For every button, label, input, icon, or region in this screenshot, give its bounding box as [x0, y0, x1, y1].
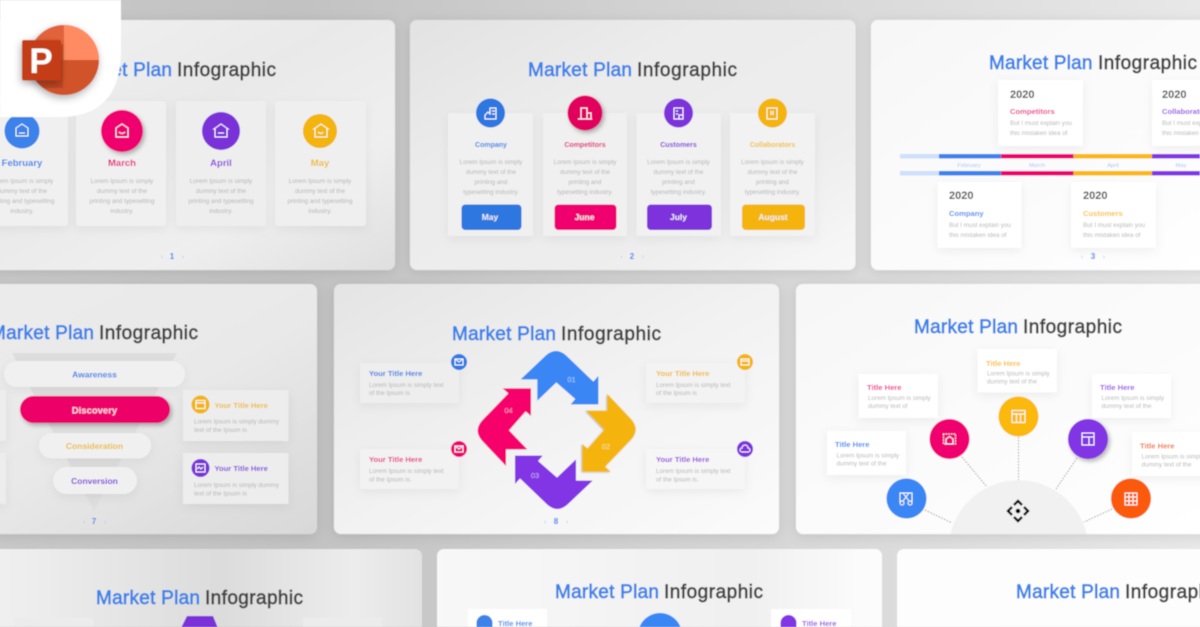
card: May: printing and typesetting: [287, 198, 353, 205]
heading: slide 9 title: Market Plan: [914, 317, 1018, 338]
panel: slide 2 quarters: [410, 20, 856, 270]
heading: slide 8 title: Market Plan: [452, 324, 556, 345]
card: Collaborators: [730, 98, 815, 236]
card: Competitors 2020: But I must explain you: [1010, 120, 1072, 127]
page number 7: ‹: [83, 519, 86, 526]
card: bottom-right purple: [646, 441, 753, 489]
heading: slide 3 title: [989, 53, 1197, 74]
funnel step: Consideration: [39, 433, 151, 458]
heading: slide 7 title: Infographic: [99, 323, 198, 344]
card: blue title: dummy text of the: [836, 460, 887, 468]
card: Company 2020: 2020: [949, 190, 973, 202]
card: February: industry.: [10, 208, 34, 215]
card: March: March: [108, 158, 136, 169]
card: February: February: [2, 158, 43, 169]
funnel step: Conversion: Conversion: [71, 476, 118, 486]
timeline bars: May: [1176, 163, 1187, 169]
card: April: April: [210, 158, 232, 169]
card: bottom-left pink: Your Title Here: [369, 455, 422, 464]
cycle arrows: [478, 351, 636, 509]
card: Competitors 2020: this mistaken idea of: [1010, 130, 1068, 137]
page number 2: [620, 252, 645, 261]
card: Company: Company: [475, 142, 507, 149]
card: Collaborators 2020: [1152, 80, 1200, 146]
arrow numbers: 03: [531, 471, 539, 480]
card: April: dummy text of the: [196, 188, 247, 195]
heading: slide 11 title: [555, 582, 763, 603]
arrow: 04 pink: [478, 388, 531, 466]
card: Company 2020: Company: [949, 209, 984, 218]
heading: slide 1 title: [68, 60, 276, 81]
card: bottom-left pink: of the Ipsum is.: [369, 476, 412, 484]
arrow numbers: 01: [567, 375, 576, 384]
panel: slide 9 semicircle hub: [796, 284, 1200, 534]
arrow: 02 yellow: [582, 394, 636, 472]
page number 7: ›: [104, 519, 107, 526]
card: Competitors 2020: Competitors: [1010, 107, 1055, 116]
card: Company: [448, 98, 533, 236]
card: bottom-left pink: [360, 441, 467, 489]
card: top-left blue: [360, 354, 467, 403]
card: yellow title: Lorem Ipsum is simply: [987, 370, 1050, 378]
node: orange grid: [1111, 478, 1151, 518]
node: blue scissors: [886, 478, 926, 518]
card: April: Lorem Ipsum is simply: [190, 178, 253, 185]
card: Customers 2020: Customers: [1083, 209, 1123, 218]
card: purple title: Lorem Ipsum is simply dummy: [194, 482, 280, 489]
card: top-right yellow: Lorem Ipsum is simply text: [656, 382, 731, 389]
heading: slide 3 title: Infographic: [1098, 53, 1197, 74]
heading: slide 2 title: Infographic: [637, 60, 737, 81]
page number 2: ‹: [620, 254, 623, 261]
heading: slide 2 title: [528, 60, 737, 81]
card: Competitors: Competitors: [564, 142, 606, 149]
heading: slide 9 title: Infographic: [1023, 317, 1122, 338]
heading: slide 9 title: [914, 317, 1122, 338]
card: purple title: dummy text of the: [1102, 403, 1152, 410]
card: May: dummy text of the: [295, 188, 346, 195]
funnel step: Conversion: [53, 467, 137, 494]
funnel step: Discovery: [20, 396, 170, 423]
card: Customers 2020: this mistaken idea of: [1083, 232, 1141, 239]
card: Customers: Lorem Ipsum is simply: [647, 159, 711, 166]
card: April: [176, 101, 266, 226]
arrow numbers: 04: [504, 406, 513, 415]
card: top-left blue: Lorem Ipsum is simply text: [369, 382, 444, 389]
card: Collaborators: dummy text of the: [747, 169, 798, 176]
heading: slide 11 title: Market Plan: [555, 582, 659, 603]
card: Competitors: June: [575, 212, 595, 222]
panel: slide 10 partial: [0, 549, 422, 627]
card: March: [76, 101, 166, 226]
card: Company 2020: But I must explain you: [949, 222, 1011, 229]
card: blue title: Title Here: [835, 440, 869, 449]
card: top-right yellow: of the Ipsum is: [656, 390, 697, 397]
card: Collaborators: August: [758, 212, 788, 222]
card: top-right yellow: [646, 354, 753, 403]
page number 1: [161, 252, 185, 261]
node: yellow table: [998, 396, 1038, 436]
heading: slide 8 title: Infographic: [561, 324, 661, 345]
card: Competitors: [543, 96, 627, 236]
card: bottom-right purple: of the Ipsum is.: [656, 476, 699, 484]
card: Company: dummy text of the: [466, 169, 517, 176]
node: purple layout: [1068, 419, 1108, 459]
card: Company 2020: [938, 182, 1022, 248]
card: May: industry.: [308, 208, 332, 215]
card: blue title: Lorem Ipsum is simply: [836, 452, 900, 460]
heading: slide 7 title: [0, 323, 198, 344]
page number 7: 7: [92, 517, 97, 526]
card: Customers: Customers: [660, 142, 697, 149]
cards partial: [14, 618, 382, 627]
badge: PowerPoint logo: [0, 0, 121, 117]
card: top-left blue: of the Ipsum is: [369, 390, 410, 397]
card: yellow title: dummy text of the: [987, 378, 1038, 386]
panel: slide 12 partial: [897, 549, 1200, 627]
card: Company: Lorem Ipsum is simply: [460, 159, 523, 166]
page number 3: ›: [1103, 254, 1106, 261]
card: yellow title: Title Here: [986, 359, 1020, 368]
card: orange title: [1132, 432, 1200, 476]
heading: slide 10 title: [96, 588, 303, 609]
arrow: 01 blue: [521, 351, 598, 404]
heading: slide 12 title: [1016, 582, 1200, 603]
heading: slide 2 title: Market Plan: [528, 60, 632, 81]
card: Customers: printing and: [662, 179, 695, 186]
card: Customers: [636, 98, 721, 236]
card: yellow title: Your Title Here: [214, 401, 268, 410]
page number 2: 2: [630, 252, 635, 261]
card: Competitors: printing and: [569, 179, 602, 186]
funnel step: Consideration: Consideration: [66, 441, 123, 451]
card: pink title: Lorem Ipsum is simply: [868, 395, 931, 402]
card: purple title: [183, 453, 288, 504]
dotted connectors: [925, 437, 1112, 523]
heading: slide 11 title: Infographic: [664, 582, 763, 603]
card: Competitors: Lorem Ipsum is simply: [554, 159, 617, 166]
heading: slide 8 title: [452, 324, 661, 345]
page number 2: ›: [642, 254, 645, 261]
card: Company: printing and: [475, 179, 508, 186]
card: purple title: text of the Ipsum is: [194, 490, 247, 498]
page number 1: ‹: [161, 254, 164, 261]
card: bottom-left pink: Lorem Ipsum is simply text: [369, 468, 444, 475]
card: Collaborators: Collaborators: [750, 142, 795, 149]
card: Customers 2020: [1071, 182, 1156, 248]
card: yellow title: text of the Ipsum is: [194, 427, 247, 434]
heading: slide 1 title: Market Plan: [68, 60, 172, 81]
card: bottom-right purple: Lorem Ipsum is simply text: [656, 468, 731, 475]
timeline bars: April: [1107, 163, 1119, 169]
page number 1: 1: [170, 252, 175, 261]
card: purple title: [1092, 374, 1171, 418]
icon: hub target: [1008, 501, 1028, 521]
card: right title: [771, 609, 851, 627]
page number 7: [83, 517, 107, 526]
card: Collaborators: printing and: [756, 179, 789, 186]
funnel step: Awareness: Awareness: [72, 370, 117, 380]
page number 8: 8: [554, 517, 559, 526]
blue centre circle: [640, 613, 680, 627]
card: February: [0, 101, 68, 226]
funnel step: Discovery: Discovery: [72, 406, 118, 416]
card: Customers: typesetting industry.: [651, 189, 707, 196]
heading: slide 12 title: Market Plan: [1016, 582, 1120, 603]
page number 8: ‹: [544, 519, 547, 526]
card: Company: typesetting industry.: [463, 189, 519, 196]
card: Competitors 2020: [998, 80, 1083, 146]
card: April: industry.: [209, 208, 233, 215]
purple hexagon top: [182, 616, 218, 627]
page number 1: ›: [182, 254, 185, 261]
page number 3: [1081, 252, 1106, 261]
heading: slide 1 title: Infographic: [177, 60, 276, 81]
card: Customers: July: [670, 212, 687, 222]
card: May: Lorem Ipsum is simply: [289, 178, 352, 185]
node: pink camera: [930, 419, 970, 459]
card: pink title: [858, 374, 938, 418]
panel: slide 3 timeline: [871, 20, 1200, 270]
page number 3: ‹: [1081, 254, 1084, 261]
card: Collaborators: Lorem Ipsum is simply: [741, 159, 805, 166]
card: blue title: [827, 431, 906, 475]
card: pink title: dummy text of: [868, 403, 908, 410]
panel: slide 1 months: [0, 20, 395, 270]
card: yellow title: Lorem Ipsum is simply dummy: [194, 418, 280, 426]
funnel step: Awareness: [4, 361, 185, 387]
card: May: [275, 101, 366, 226]
card: bottom-right purple: Your Title Here: [656, 455, 709, 464]
card: orange title: dummy text of the: [1142, 462, 1192, 468]
arrow: 03 purple: [515, 456, 593, 509]
card: April: printing and typesetting: [188, 198, 254, 205]
arrow numbers: [504, 375, 610, 480]
card: purple title: Title Here: [1100, 383, 1134, 392]
card: March: Lorem Ipsum is simply: [91, 178, 154, 185]
left cards: [0, 390, 6, 504]
card: Competitors: dummy text of the: [560, 169, 611, 176]
card: Collaborators: typesetting industry.: [745, 189, 801, 196]
page number 8: [544, 517, 569, 526]
arrow numbers: 02: [602, 442, 610, 451]
card: purple title: Lorem Ipsum is simply: [1102, 395, 1165, 402]
panel: slide 11 partial: [437, 549, 882, 627]
card: Company: May: [482, 212, 499, 222]
card: Customers: dummy text of the: [653, 169, 704, 176]
card: Competitors: typesetting industry.: [557, 189, 613, 196]
card: yellow title: [978, 349, 1057, 392]
icon: PowerPoint mark: P: [29, 42, 53, 81]
card: top-left blue: Your Title Here: [369, 369, 422, 378]
card: Company 2020: this mistaken idea of: [949, 232, 1007, 239]
card: March: printing and typesetting: [89, 198, 155, 205]
page number 3: 3: [1091, 252, 1096, 261]
card: May: May: [311, 158, 330, 169]
timeline bars: March: [1029, 163, 1045, 169]
card: Customers 2020: But I must explain you: [1083, 222, 1145, 229]
card: left title: [468, 609, 547, 627]
heading: slide 10 title: Infographic: [205, 588, 303, 609]
funnel backdrop: [12, 353, 177, 511]
timeline bars: [900, 154, 1200, 176]
panel: slide 8 arrows cycle: [334, 284, 779, 534]
card: orange title: Title Here: [1140, 442, 1174, 450]
card: purple title: Your Title Here: [214, 464, 268, 473]
panel: slide 7 funnel: [0, 284, 317, 534]
card: top-right yellow: Your Title Here: [656, 369, 709, 378]
card: March: industry.: [110, 208, 134, 215]
card: March: dummy text of the: [97, 188, 148, 195]
heading: slide 10 title: Market Plan: [96, 588, 200, 609]
heading: slide 3 title: Market Plan: [989, 53, 1092, 74]
card: Customers 2020: 2020: [1083, 190, 1107, 202]
card: Collaborators 2020: 2020: [1162, 89, 1186, 101]
card: yellow title: [183, 390, 288, 441]
card: Competitors 2020: 2020: [1010, 89, 1034, 101]
timeline bars: February: [957, 163, 981, 169]
page number 8: ›: [566, 519, 569, 526]
card: pink title: Title Here: [867, 383, 901, 392]
hub semicircle: [950, 480, 1087, 534]
